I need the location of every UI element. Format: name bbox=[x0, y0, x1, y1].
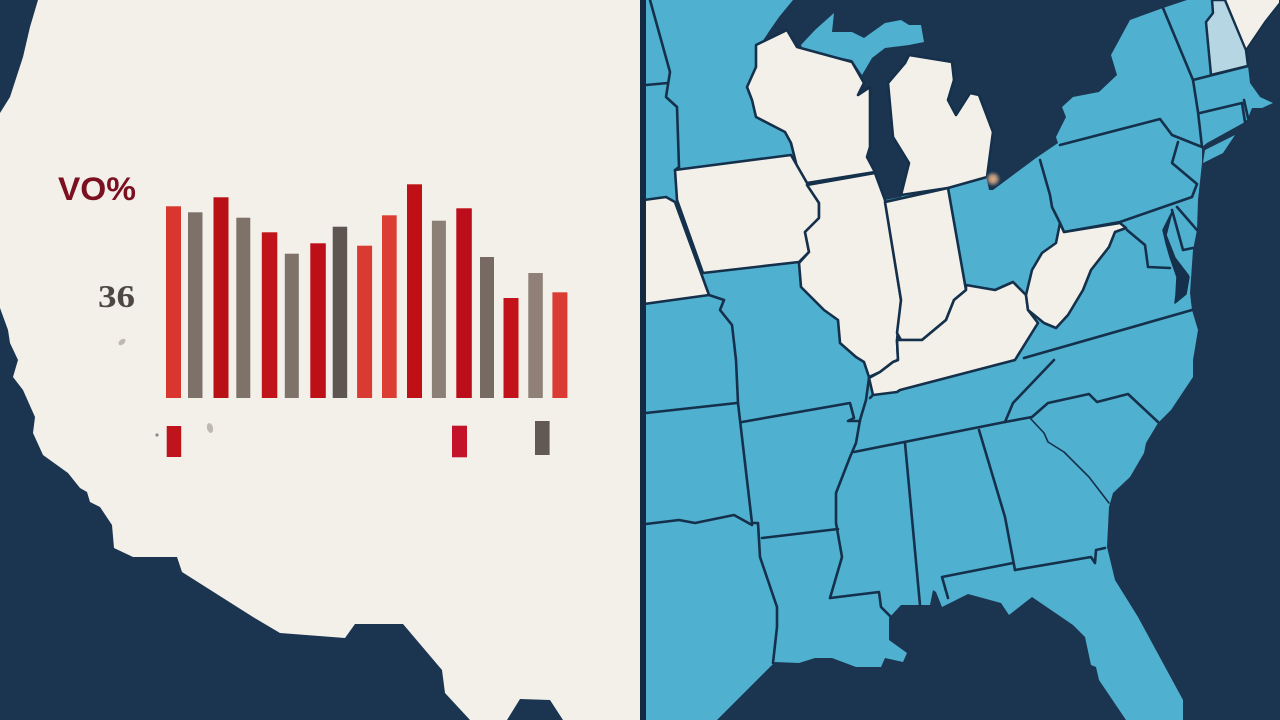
chart label: middle value: 36 bbox=[98, 278, 135, 314]
Chesapeake Bay bbox=[1163, 212, 1189, 303]
Iowa bbox=[675, 155, 819, 273]
paper specks bbox=[117, 338, 214, 437]
blue land mass bbox=[646, 0, 1273, 720]
Illinois bbox=[799, 173, 901, 377]
Long Island bbox=[1203, 135, 1235, 163]
chart label: top value: VO% bbox=[58, 171, 136, 207]
New Hampshire, pale bbox=[1206, 0, 1248, 75]
thin Georgia–South Carolina river border bbox=[1030, 418, 1109, 503]
Maine, white bbox=[1224, 0, 1280, 50]
Kentucky bbox=[869, 282, 1038, 395]
bar chart bbox=[58, 171, 567, 457]
Wisconsin bbox=[747, 30, 875, 183]
state border lines bbox=[646, 0, 1248, 663]
bars bbox=[166, 184, 567, 398]
upper peninsula bbox=[801, 13, 924, 75]
map marker: glowing dot bbox=[985, 171, 1001, 187]
white states bbox=[644, 30, 1126, 395]
panel: left landmass bbox=[0, 0, 640, 720]
Indiana bbox=[885, 188, 966, 340]
West Virginia bbox=[1026, 223, 1126, 328]
panel divider bbox=[640, 0, 646, 720]
legend swatches bbox=[167, 421, 550, 457]
map: eastern United States bbox=[644, 0, 1280, 720]
Michigan bbox=[888, 55, 993, 195]
Nebraska / South Dakota block bbox=[644, 197, 709, 304]
